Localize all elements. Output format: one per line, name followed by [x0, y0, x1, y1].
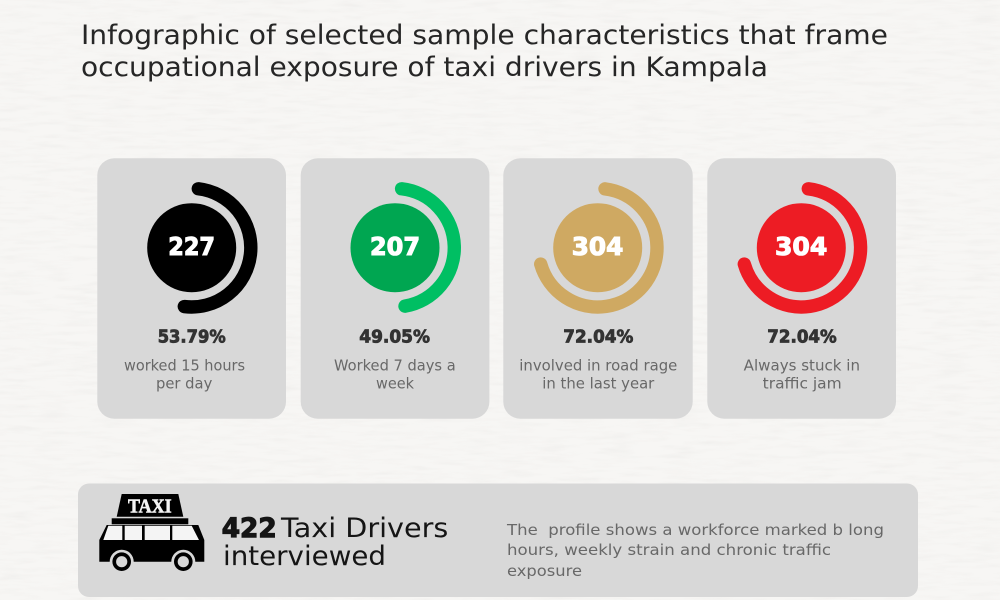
description: Worked 7 days a: [334, 357, 456, 375]
description: [519, 357, 677, 393]
percentage: 72.04%: 72.04%: [563, 328, 633, 348]
panel: worked 7 days a week: [301, 158, 489, 419]
description: worked 15 hours: [124, 357, 245, 375]
description: [334, 357, 456, 393]
heading: 422 taxi drivers interviewed: interviewed: [223, 541, 386, 572]
description: traffic jam: [763, 375, 842, 393]
icon: taxi: [99, 494, 204, 574]
panel: worked 15 hours per day: [97, 158, 286, 419]
heading: 422 taxi drivers interviewed: [222, 513, 448, 572]
text block: profile note: hours, weekly strain and chronic traffic: [507, 541, 831, 559]
ring chart: 304 gold: [541, 189, 657, 307]
panel: traffic jam: [707, 158, 896, 419]
ring chart: 304 gold: 304: [572, 232, 623, 261]
description: involved in road rage: [519, 357, 677, 375]
text block: profile note: exposure: [507, 562, 582, 580]
text block: profile note: [506, 521, 884, 580]
text block: profile note: The profile shows a workforce marked b long: [506, 521, 884, 539]
description: per day: [156, 375, 212, 393]
percentage: 53.79%: 53.79%: [158, 328, 226, 348]
description: week: [376, 375, 414, 393]
heading: 422 taxi drivers interviewed: Taxi Drivers: [280, 513, 448, 544]
ring chart: 304 red: [744, 189, 861, 307]
ring chart: 207 green: [350, 189, 454, 306]
icon: taxi: TAXI: [128, 496, 172, 518]
panel: road rage: [503, 158, 693, 419]
panel: summary: [78, 484, 918, 597]
description: Always stuck in: [744, 357, 860, 375]
ring chart: 227 black: 227: [168, 232, 215, 261]
ring chart: 227 black: [147, 189, 251, 307]
percentage: 72.04%: 72.04%: [767, 328, 837, 348]
title: Infographic of selected sample characteristics that frame: [81, 20, 888, 51]
percentage: 49.05%: 49.05%: [359, 328, 430, 348]
title: occupational exposure of taxi drivers in Kampala: [81, 52, 768, 83]
title: [81, 20, 888, 83]
description: in the last year: [542, 375, 655, 393]
heading: 422 taxi drivers interviewed: 422: [222, 513, 277, 544]
description: [744, 357, 860, 393]
ring chart: 207 green: 207: [370, 232, 420, 261]
ring chart: 304 red: 304: [775, 232, 827, 261]
description: [124, 357, 245, 393]
